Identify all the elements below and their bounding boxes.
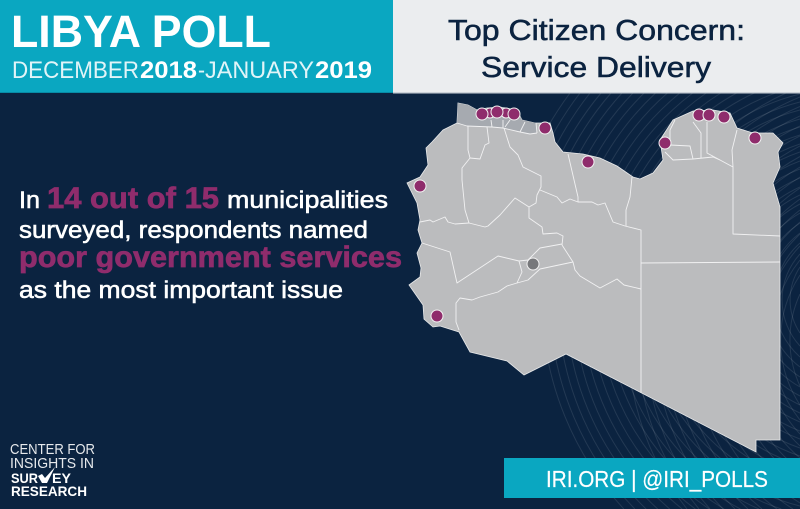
municipality marker: differing response bbox=[527, 258, 539, 270]
header panel: top citizen concern bbox=[393, 0, 800, 94]
logo: Center for Insights in Survey Research: SUR bbox=[11, 470, 38, 486]
logo: Center for Insights in Survey Research: CENTER FOR bbox=[10, 442, 95, 458]
poll dates: - bbox=[198, 57, 205, 84]
key finding text block: 14 out of 15 bbox=[47, 182, 219, 215]
heading: top citizen concern bbox=[448, 15, 745, 84]
key finding text block: surveyed, respondents named bbox=[19, 217, 368, 244]
key finding text block: as the most important issue bbox=[19, 277, 343, 304]
heading: top citizen concern: Service Delivery bbox=[481, 52, 712, 84]
logo: Center for Insights in Survey Research bbox=[10, 442, 95, 499]
surveyed municipality markers bbox=[414, 106, 761, 322]
footer: website and social handle: IRI.ORG | @IRI_POLLS bbox=[546, 466, 768, 492]
poll dates bbox=[12, 57, 372, 84]
poll dates: 2018 bbox=[140, 57, 197, 84]
footer: website and social handle bbox=[504, 458, 800, 498]
map outline bbox=[407, 103, 783, 452]
municipal boundaries bbox=[420, 120, 780, 393]
key finding text block bbox=[19, 182, 402, 304]
logo: Center for Insights in Survey Research: INSIGHTS IN bbox=[10, 456, 94, 472]
key finding text block: poor government services bbox=[19, 241, 402, 274]
key finding text block: municipalities bbox=[227, 187, 388, 214]
header panel: poll title bbox=[0, 0, 393, 93]
poll dates: DECEMBER bbox=[12, 57, 139, 84]
heading: Libya Poll: LIBYA POLL bbox=[11, 6, 271, 57]
icon: check mark bbox=[38, 467, 55, 483]
poll dates: JANUARY bbox=[205, 57, 314, 84]
logo: Center for Insights in Survey Research: RESEARCH bbox=[11, 483, 87, 499]
poll dates: 2019 bbox=[315, 57, 372, 84]
heading: top citizen concern: Top Citizen Concern: bbox=[448, 15, 745, 47]
logo: Center for Insights in Survey Research: EY bbox=[52, 470, 72, 486]
key finding text block: In bbox=[19, 187, 40, 214]
map of Libya bbox=[407, 103, 783, 452]
darker northwest districts bbox=[457, 103, 537, 134]
